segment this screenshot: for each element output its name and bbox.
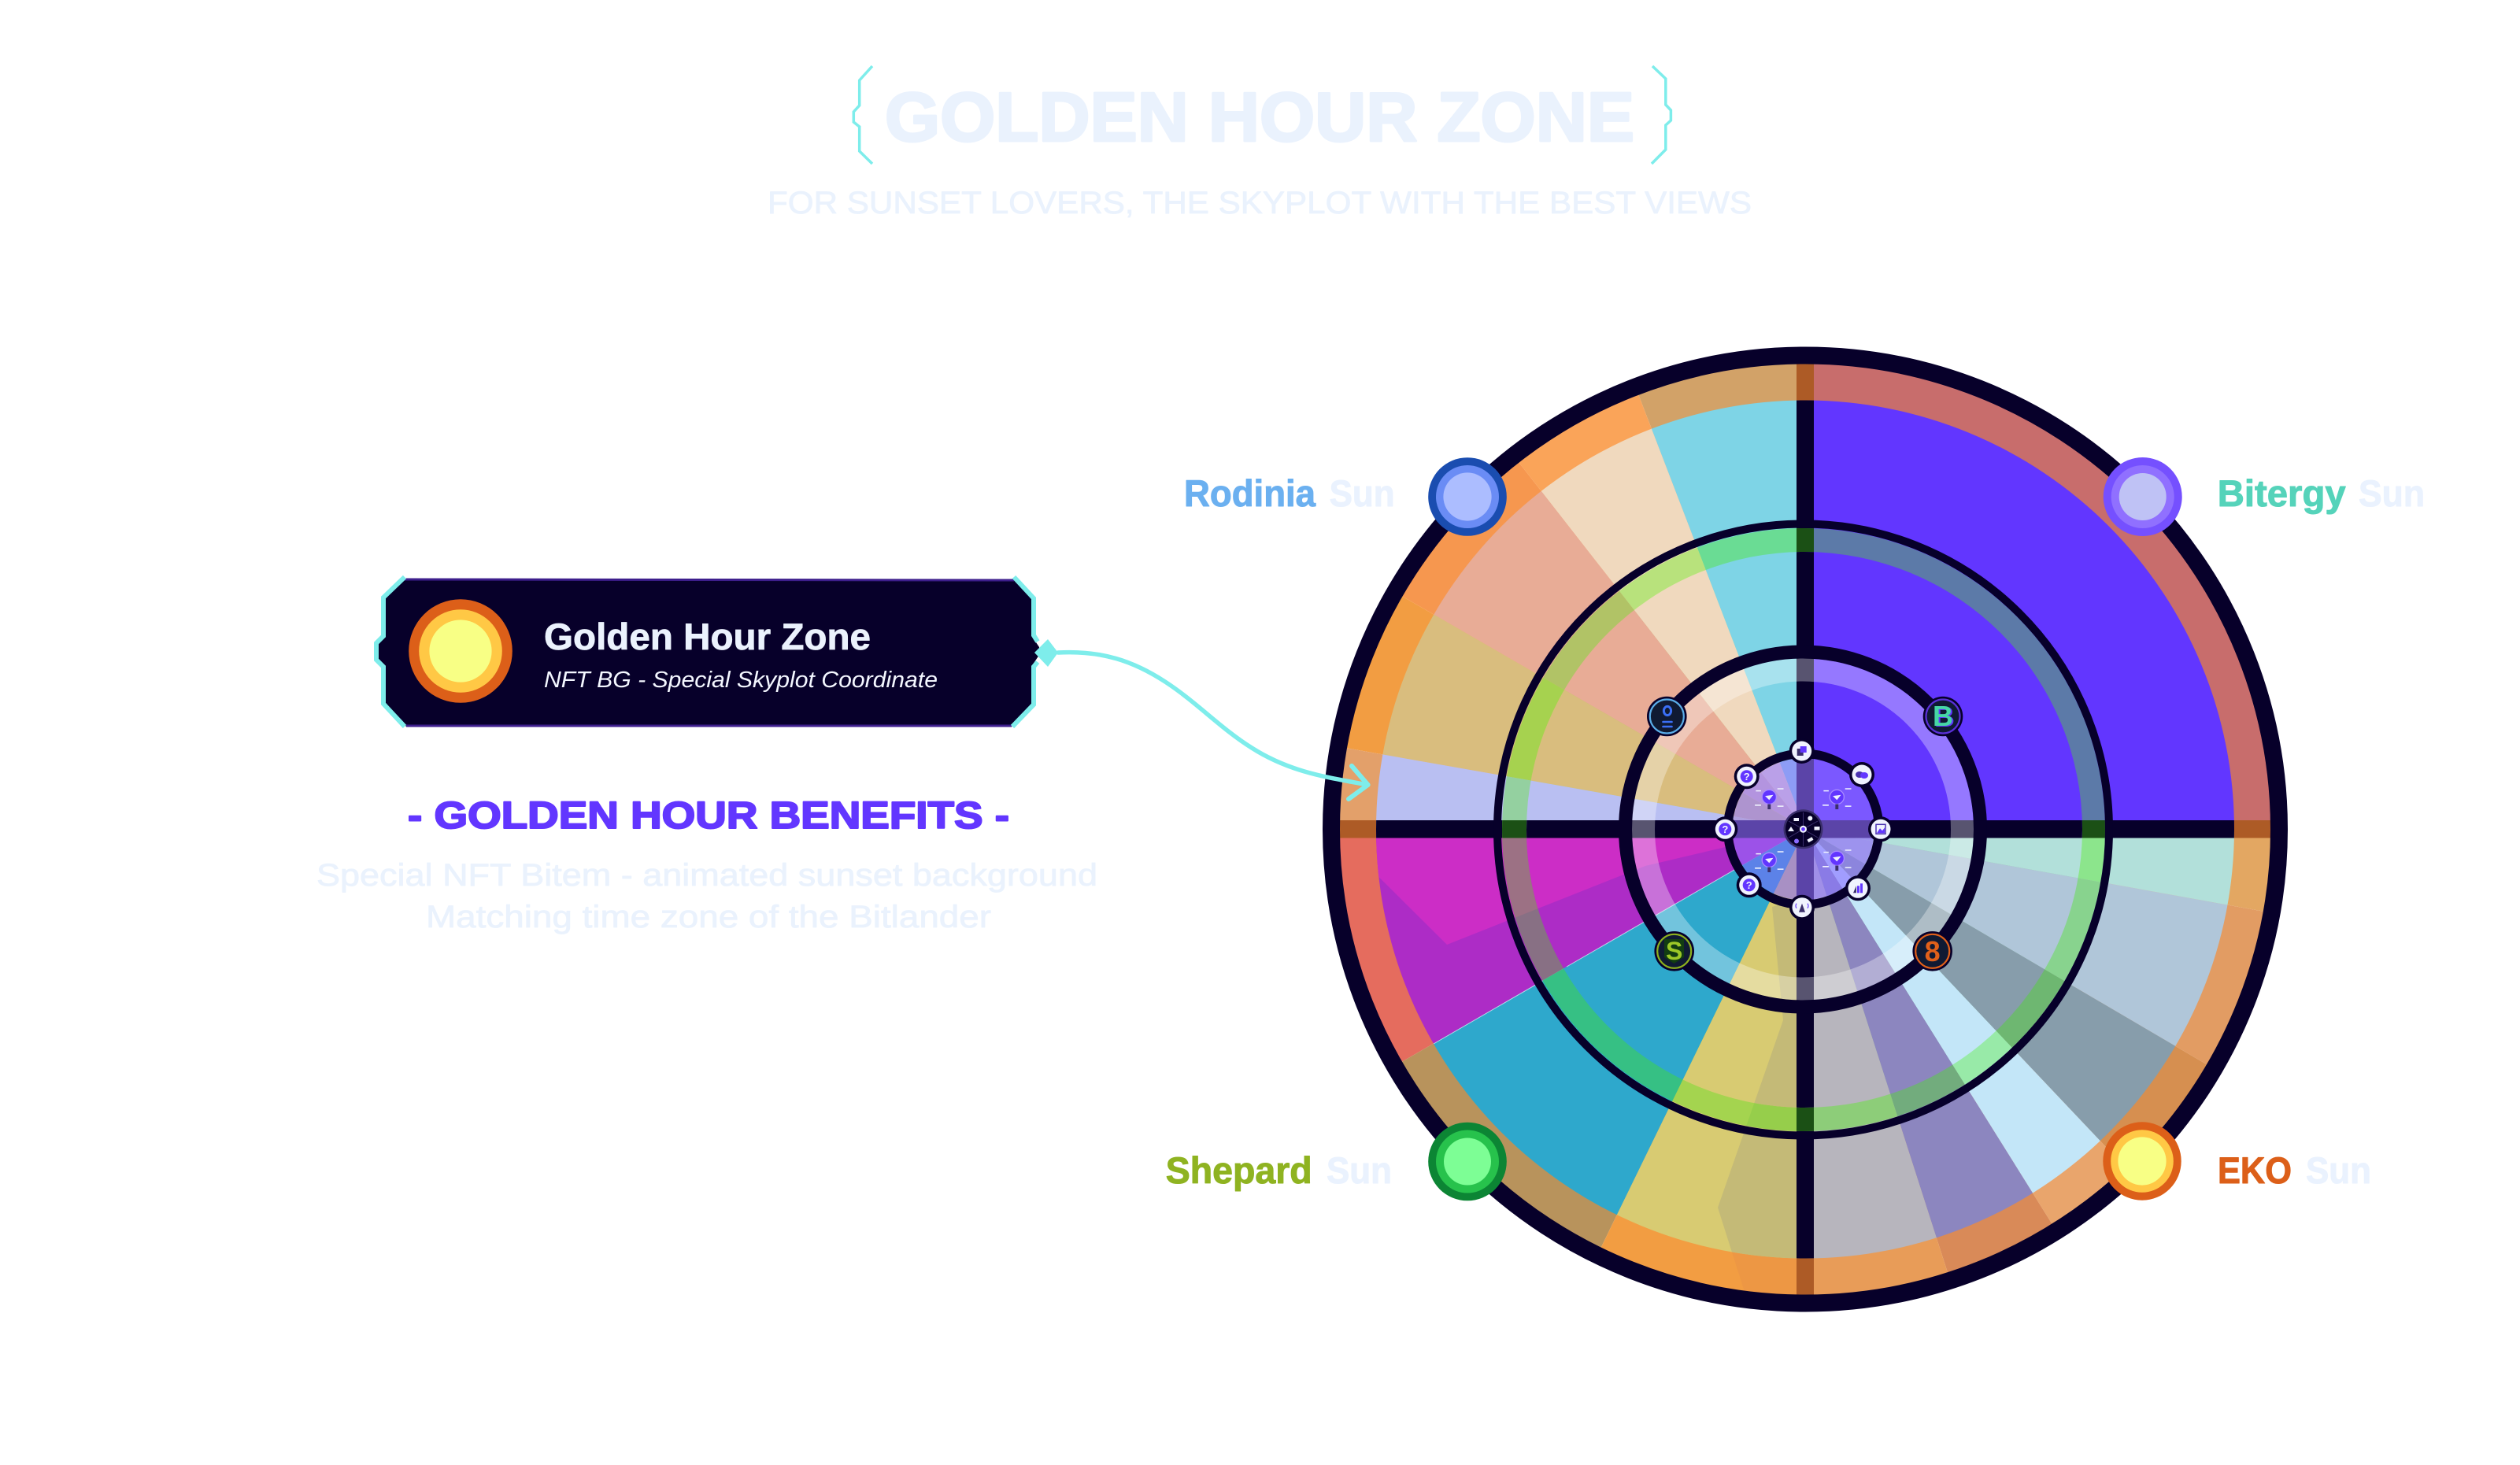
label: Shepard Sun xyxy=(1166,1149,1392,1191)
card right edge xyxy=(1012,577,1038,727)
balloon markers xyxy=(1755,789,1852,872)
benefits heading: - GOLDEN HOUR BENEFITS - xyxy=(408,795,1009,837)
knob: top cube icon xyxy=(1789,738,1815,764)
outer ring xyxy=(1331,356,2279,1304)
icon: card sun xyxy=(409,599,513,703)
knob: tower icon xyxy=(1789,895,1815,920)
outer band segments xyxy=(1340,364,2270,1294)
benefits text: Special NFT Bitem - animated sunset background xyxy=(316,858,1097,893)
inner ring xyxy=(1625,652,1981,1007)
benefits text xyxy=(316,858,1097,934)
central disc ring xyxy=(1728,753,1879,905)
title block xyxy=(768,66,1752,220)
knob: picture icon xyxy=(1868,816,1893,842)
sun: Rodinia xyxy=(1428,457,1507,536)
medallion: EKO xyxy=(1912,931,1952,971)
label: Bitergy Sun xyxy=(2218,472,2425,514)
card left edge xyxy=(376,577,405,727)
title bracket: right xyxy=(1652,66,1671,164)
sun: Bitergy xyxy=(2104,457,2182,536)
label: EKO Sun: EKO xyxy=(2218,1149,2292,1191)
knob: unknown northwest xyxy=(1734,764,1760,789)
medallion: Shepard: S xyxy=(1666,937,1682,965)
middle green band segments xyxy=(1502,528,2105,1131)
central disc segments xyxy=(1734,759,1874,900)
knob: unknown southwest xyxy=(1737,872,1762,897)
card top and bottom edge xyxy=(404,579,1014,726)
title bracket: left xyxy=(853,66,872,164)
card heading: Golden Hour Zone xyxy=(544,616,871,657)
medallion: Shepard xyxy=(1654,931,1694,971)
medallion: Bitergy xyxy=(1923,697,1963,736)
medallion: Bitergy: B xyxy=(1934,701,1955,733)
panel: golden hour zone card xyxy=(376,577,1039,727)
label: Rodinia Sun: Sun xyxy=(1330,472,1395,514)
label: Rodinia Sun xyxy=(1184,472,1395,514)
medallion: Rodinia xyxy=(1647,697,1687,736)
middle ring xyxy=(1497,524,2109,1135)
skyplot chart xyxy=(1323,346,2288,1311)
translucent white band xyxy=(1644,670,1962,989)
subtitle: FOR SUNSET LOVERS, THE SKYPLOT WITH THE BEST VIEWS xyxy=(768,186,1752,220)
label: EKO Sun xyxy=(2218,1149,2371,1191)
label: Rodinia Sun: Rodinia xyxy=(1184,472,1316,514)
title: GOLDEN HOUR ZONE xyxy=(885,78,1634,156)
knob: masks icon xyxy=(1849,762,1874,787)
label: EKO Sun: Sun xyxy=(2306,1149,2371,1191)
arrow from card to skyplot xyxy=(1034,639,1368,799)
medallion: Bitergy: B xyxy=(1933,700,1953,732)
card body xyxy=(378,579,1039,727)
sun: EKO xyxy=(2103,1122,2181,1200)
knob: unknown west xyxy=(1712,816,1737,842)
inner field segments xyxy=(1526,552,2082,1108)
knob: bars icon xyxy=(1845,875,1871,901)
central hub xyxy=(1784,809,1823,849)
label: Shepard Sun: Shepard xyxy=(1166,1149,1312,1191)
benefits text: Matching time zone of the Bitlander xyxy=(426,900,991,934)
label: Shepard Sun: Sun xyxy=(1327,1149,1392,1191)
sun: Shepard xyxy=(1428,1123,1507,1200)
label: Bitergy Sun: Sun xyxy=(2359,472,2425,514)
card subtitle: NFT BG - Special Skyplot Coordinate xyxy=(544,668,938,693)
outer field segments xyxy=(1376,400,2234,1258)
medallion: EKO: 8 xyxy=(1925,935,1941,967)
label: Bitergy Sun: Bitergy xyxy=(2218,472,2346,514)
